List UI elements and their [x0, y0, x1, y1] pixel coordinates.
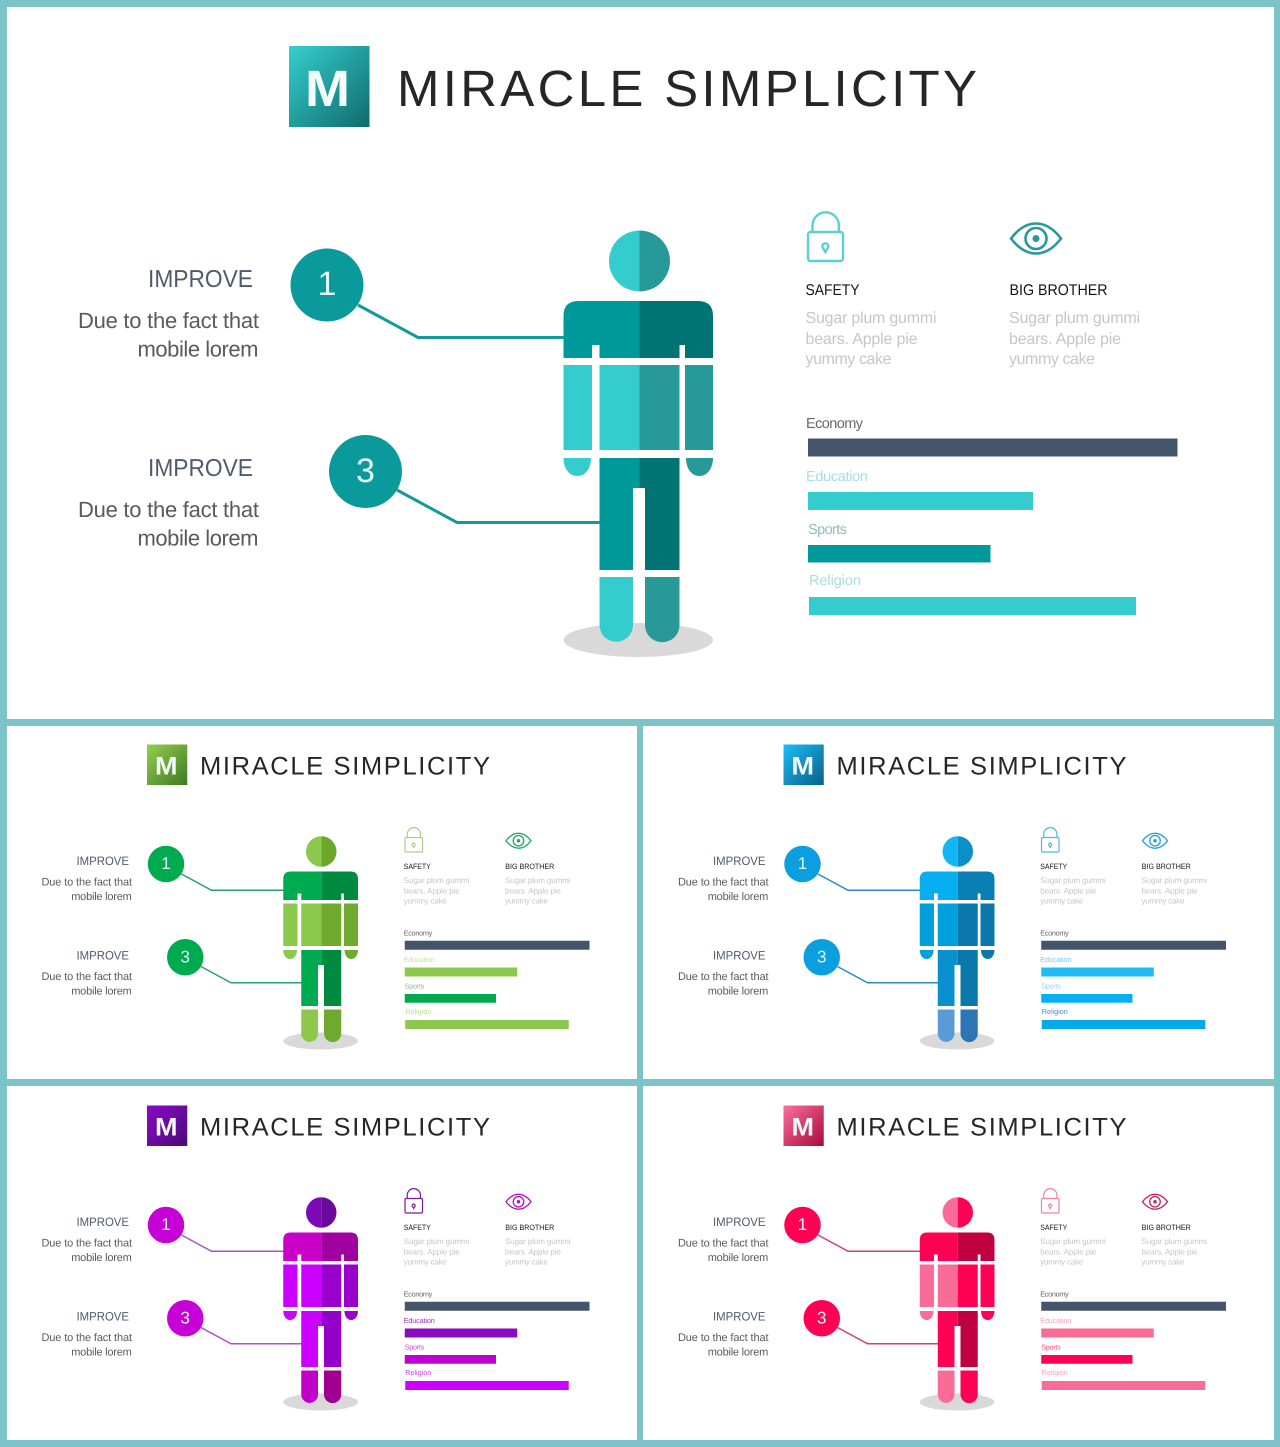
callout 3: mobile lorem [71, 984, 132, 997]
icon: eye [1142, 833, 1168, 848]
callout 3: mobile lorem [138, 526, 258, 551]
text: big brother: yummy cake [1009, 351, 1095, 368]
number badge 1 [148, 846, 184, 882]
text: safety: bears. Apple pie [404, 887, 460, 896]
bar chart: Religion [809, 573, 861, 589]
callout 1: Due to the fact that [678, 1236, 768, 1249]
bar chart: Sports [405, 982, 424, 990]
bar chart: Sports [405, 1344, 424, 1352]
connector line 3 [397, 490, 600, 522]
panel: blue slide [643, 726, 1274, 1079]
text: safety: bears. Apple pie [1040, 1248, 1096, 1256]
text: big brother: Sugar plum gummi [505, 876, 570, 885]
bar chart: Economy [1040, 930, 1069, 938]
number badge 1: 1 [798, 1215, 807, 1234]
text: big brother: yummy cake [1142, 897, 1185, 906]
callout 1: mobile lorem [138, 337, 258, 362]
text: big brother: bears. Apple pie [505, 887, 561, 896]
icon: padlock [1042, 828, 1059, 852]
logo: M [155, 752, 178, 780]
callout 3: IMPROVE [713, 949, 766, 962]
callout 1 [78, 266, 259, 362]
number badge 1: 1 [318, 265, 336, 303]
text: big brother: BIG BROTHER [505, 862, 554, 871]
callout 3: Due to the fact that [678, 1331, 768, 1344]
bar chart [806, 416, 1178, 615]
bar chart: Economy [404, 930, 433, 938]
text: safety: SAFETY [404, 862, 431, 871]
connector line 1 [818, 874, 920, 890]
number badge 3: 3 [181, 948, 190, 966]
text: safety [1040, 862, 1106, 906]
text: big brother: bears. Apple pie [505, 1248, 561, 1256]
number badge 1: 1 [161, 854, 171, 873]
callout 3: IMPROVE [148, 455, 253, 482]
bar chart: Education [806, 469, 868, 485]
callout 1: IMPROVE [713, 854, 766, 868]
text: safety: SAFETY [1040, 862, 1067, 871]
human figure [564, 230, 713, 657]
callout 3 [678, 1310, 768, 1358]
callout 1: IMPROVE [713, 1216, 766, 1229]
icon: padlock [1042, 1189, 1059, 1213]
text: safety [1040, 1224, 1106, 1266]
number badge 3: 3 [817, 948, 826, 966]
number badge 3 [804, 939, 840, 976]
icon: padlock [405, 1189, 422, 1213]
callout 3: mobile lorem [71, 1345, 132, 1358]
text: safety: Sugar plum gummi [1040, 1238, 1106, 1246]
bar chart [1040, 1290, 1226, 1390]
bar chart: Economy [806, 416, 864, 432]
icon: eye [1142, 1194, 1168, 1209]
text: big brother: BIG BROTHER [1010, 282, 1108, 299]
connector line 3 [838, 966, 938, 983]
human figure [283, 836, 358, 1050]
text: safety: bears. Apple pie [404, 1248, 460, 1256]
callout 1: Due to the fact that [42, 876, 132, 888]
text: big brother: BIG BROTHER [1142, 862, 1191, 871]
number badge 1 [290, 248, 364, 322]
callout 1: IMPROVE [76, 854, 129, 868]
bar chart: Economy [404, 1290, 433, 1298]
panel: green slide [7, 726, 637, 1079]
text: safety: yummy cake [404, 897, 447, 906]
logo [784, 1106, 824, 1146]
logo: M [305, 60, 350, 117]
human figure [920, 1197, 994, 1410]
text: safety: yummy cake [1040, 897, 1083, 906]
icon: eye [506, 1194, 531, 1209]
panel: main teal slide [7, 7, 1274, 719]
bar chart: Education [404, 1317, 435, 1325]
title: MIRACLE SIMPLICITY [200, 1112, 490, 1141]
text: big brother: yummy cake [505, 1258, 548, 1266]
bar chart [404, 1290, 590, 1390]
human figure [920, 836, 994, 1050]
text: big brother [505, 1224, 570, 1266]
bar chart: Education [1040, 1317, 1071, 1325]
text: safety: SAFETY [1040, 1224, 1067, 1232]
logo: M [792, 1112, 814, 1141]
text: safety: SAFETY [404, 1224, 431, 1232]
text: big brother: Sugar plum gummi [1009, 310, 1140, 327]
callout 3: Due to the fact that [42, 970, 132, 982]
text: safety: Sugar plum gummi [806, 310, 936, 327]
bar chart [1040, 930, 1226, 1029]
title: MIRACLE SIMPLICITY [200, 752, 490, 780]
text: safety: yummy cake [806, 351, 892, 368]
panel: pink slide [643, 1086, 1274, 1440]
title: MIRACLE SIMPLICITY [397, 60, 977, 117]
number badge 1 [784, 1207, 821, 1243]
number badge 1: 1 [798, 854, 807, 873]
logo: M [792, 752, 814, 780]
text: safety: Sugar plum gummi [1040, 876, 1106, 885]
number badge 1 [784, 846, 821, 882]
callout 1: Due to the fact that [78, 308, 259, 333]
text: safety: Sugar plum gummi [404, 876, 469, 885]
callout 1 [678, 854, 768, 902]
text: safety [404, 1224, 469, 1266]
callout 1: mobile lorem [708, 1251, 768, 1263]
callout 1 [42, 1216, 132, 1263]
callout 1 [678, 1216, 768, 1263]
text: safety [404, 862, 469, 906]
logo [147, 744, 187, 785]
text: big brother [1142, 1224, 1207, 1266]
callout 3: Due to the fact that [678, 970, 768, 982]
number badge 3 [167, 939, 204, 976]
connector line 1 [818, 1235, 920, 1251]
logo [289, 46, 370, 127]
bar chart: Sports [1041, 982, 1061, 990]
human figure [283, 1197, 358, 1410]
bar chart [404, 930, 590, 1029]
callout 3 [78, 455, 259, 551]
bar chart: Sports [1041, 1344, 1061, 1352]
connector line 3 [201, 966, 302, 983]
callout 3: Due to the fact that [78, 497, 259, 522]
text: safety: SAFETY [806, 282, 860, 299]
connector line 3 [201, 1328, 302, 1344]
callout 3: mobile lorem [708, 1345, 768, 1358]
text: safety: yummy cake [1040, 1258, 1083, 1266]
number badge 3: 3 [817, 1308, 826, 1328]
text: big brother: bears. Apple pie [1142, 887, 1198, 896]
title: MIRACLE SIMPLICITY [836, 752, 1126, 780]
callout 1 [42, 854, 132, 902]
text: big brother: yummy cake [1142, 1258, 1185, 1266]
number badge 3: 3 [181, 1308, 190, 1328]
text: big brother: BIG BROTHER [505, 1224, 554, 1232]
number badge 1: 1 [161, 1215, 171, 1234]
number badge 3 [804, 1300, 840, 1336]
text: big brother: Sugar plum gummi [505, 1238, 570, 1246]
callout 3: IMPROVE [76, 1310, 129, 1324]
callout 3: Due to the fact that [42, 1331, 132, 1344]
callout 3: mobile lorem [708, 984, 768, 997]
icon: eye [506, 833, 531, 848]
callout 1: mobile lorem [71, 1251, 132, 1263]
callout 1: IMPROVE [148, 266, 253, 293]
number badge 3 [167, 1300, 204, 1336]
number badge 3: 3 [356, 452, 375, 490]
text: big brother: Sugar plum gummi [1142, 876, 1207, 885]
number badge 3 [329, 435, 402, 508]
callout 1: Due to the fact that [42, 1236, 132, 1249]
bar chart: Religion [1042, 1008, 1068, 1016]
callout 1: IMPROVE [76, 1216, 129, 1229]
connector line 1 [182, 874, 284, 890]
callout 1: Due to the fact that [678, 876, 768, 888]
connector line 1 [358, 305, 564, 338]
icon: eye [1011, 224, 1061, 254]
callout 3: IMPROVE [76, 949, 129, 962]
connector line 1 [182, 1235, 284, 1251]
text: big brother [1142, 862, 1207, 906]
connector line 3 [838, 1328, 938, 1344]
icon: padlock [808, 212, 843, 261]
callout 1: mobile lorem [708, 890, 768, 902]
logo: M [155, 1112, 178, 1141]
text: big brother: Sugar plum gummi [1142, 1238, 1207, 1246]
text: safety [806, 282, 936, 368]
text: big brother: bears. Apple pie [1009, 331, 1121, 348]
icon: padlock [405, 828, 422, 852]
number badge 1 [148, 1207, 184, 1243]
callout 3 [42, 1310, 132, 1358]
text: big brother [1009, 282, 1140, 368]
callout 3 [42, 949, 132, 997]
callout 1: mobile lorem [71, 890, 132, 902]
bar chart: Education [1040, 956, 1071, 964]
text: safety: Sugar plum gummi [404, 1238, 469, 1246]
bar chart: Religion [405, 1369, 431, 1377]
text: safety: bears. Apple pie [806, 331, 918, 348]
callout 3: IMPROVE [713, 1310, 766, 1324]
logo [784, 744, 824, 785]
callout 3 [678, 949, 768, 997]
text: big brother: yummy cake [505, 897, 548, 906]
bar chart: Sports [808, 522, 847, 538]
bar chart: Economy [1040, 1290, 1069, 1298]
text: big brother: bears. Apple pie [1142, 1248, 1198, 1256]
bar chart: Education [404, 956, 435, 964]
bar chart: Religion [405, 1008, 431, 1016]
text: big brother: BIG BROTHER [1142, 1224, 1191, 1232]
title: MIRACLE SIMPLICITY [836, 1112, 1126, 1141]
text: big brother [505, 862, 570, 906]
panel: purple slide [7, 1086, 637, 1440]
bar chart: Religion [1042, 1369, 1068, 1377]
text: safety: bears. Apple pie [1040, 887, 1096, 896]
text: safety: yummy cake [404, 1258, 447, 1266]
logo [147, 1106, 187, 1146]
